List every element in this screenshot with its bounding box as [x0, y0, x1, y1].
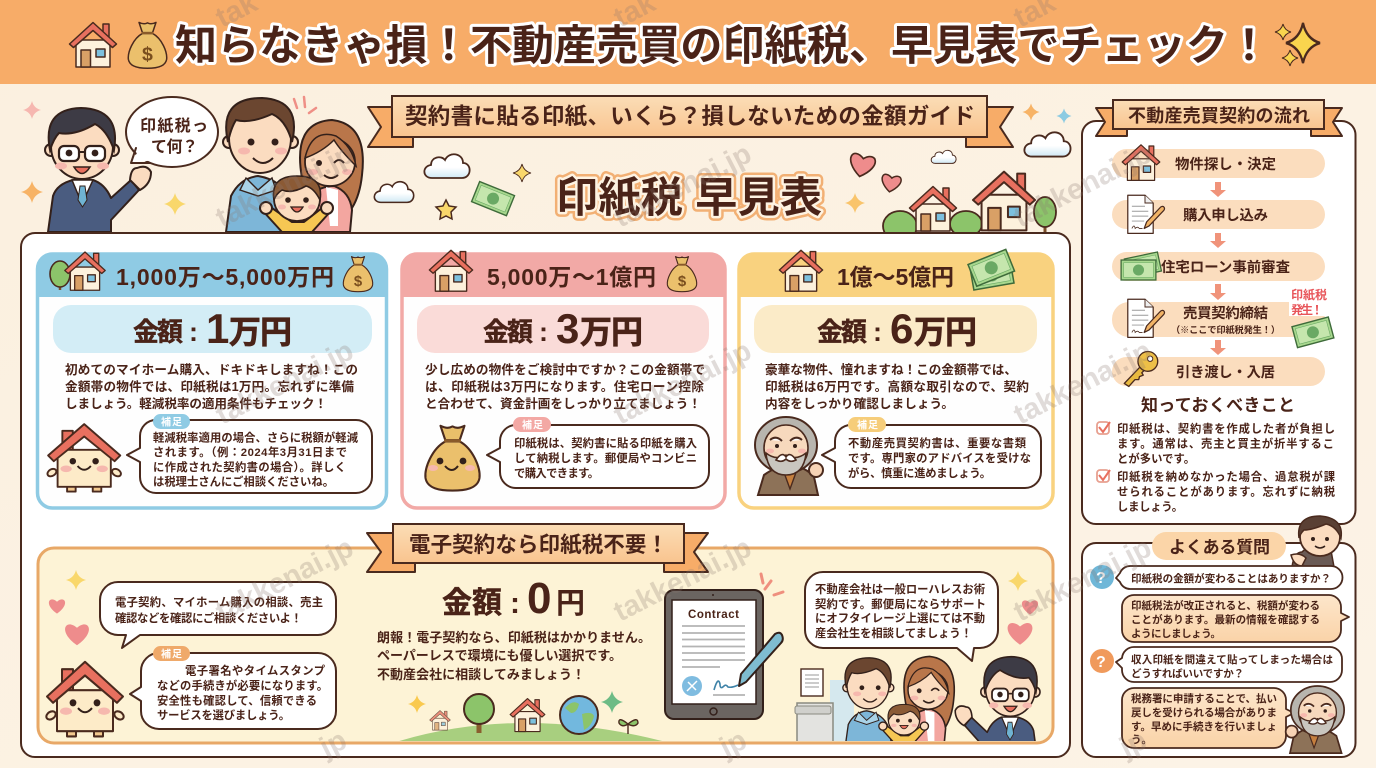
step 2: [1112, 195, 1325, 233]
note bubble: [127, 414, 372, 493]
price range heading: 1,000万〜5,000万円: [116, 264, 334, 290]
panel: 1億〜5億円: [739, 249, 1053, 508]
illustration: office, family and agent: [794, 656, 1041, 741]
description text: [377, 630, 651, 682]
speech bubble: [126, 97, 218, 167]
watermarks: takkenai.jp: [211, 335, 359, 431]
panel: electronic contract: [38, 548, 1053, 761]
description text: [765, 362, 1029, 411]
main heading: 印紙税 早見表: [556, 174, 822, 221]
watermarks: [211, 0, 1157, 765]
step 3: 住宅ローン事前審査: [1161, 258, 1290, 276]
icon: flying banknote: [472, 182, 515, 216]
watermarks: takkenai.jp: [1009, 532, 1157, 628]
amount pill: 6: [890, 305, 913, 352]
question icon: [1090, 649, 1114, 673]
description text: は、印紙税は3万円になります。住宅ローン控除: [425, 379, 704, 394]
arrow: [1210, 233, 1226, 248]
illustration: family: [223, 98, 363, 232]
note bubble: 補足: [161, 416, 182, 428]
watermarks: takkenai.jp: [609, 532, 757, 628]
question 2: どうすればいいですか？: [1131, 667, 1244, 680]
note bubble: 軽減税率適用の場合、さらに税額が軽減: [153, 430, 359, 444]
note bubble: 不動産売買契約書は、重要な書類: [848, 436, 1027, 450]
speech bubble: consult: 確認などを確認にご相談くださいよ！: [115, 611, 302, 625]
amount: [442, 574, 585, 623]
amount pill: :: [539, 317, 548, 347]
speech bubble: 印紙税っ: [140, 116, 208, 135]
note bubble: して納税します。郵便局やコンビニ: [514, 451, 697, 465]
watermarks: takkenai.jp: [609, 138, 757, 234]
banner: electronic contract ribbon: [367, 524, 708, 572]
amount: 0: [527, 574, 551, 623]
main heading: 印紙税 早見表: [556, 174, 822, 221]
answer 1: ようにしましょう。: [1131, 628, 1221, 640]
panel: FAQ: [1082, 516, 1356, 757]
header band: [0, 0, 1376, 84]
watermarks: jp: [314, 724, 352, 765]
watermarks: takkenai.jp: [211, 138, 359, 234]
checklist: [1097, 422, 1336, 514]
watermarks: jp: [714, 724, 752, 765]
amount pill: 1: [206, 305, 229, 352]
description text: と合わせて、資金計画をしっかり立てましょう！: [425, 396, 701, 411]
mascot: money bag: [425, 426, 480, 491]
checklist: しましょう。: [1117, 500, 1183, 514]
callout: stamp tax occurs: 印紙税: [1291, 287, 1327, 302]
banner: subtitle ribbon: [368, 96, 1013, 147]
speech bubble: consult: 電子契約、マイホーム購入の相談、売主: [115, 595, 323, 609]
speech bubble: real estate agent: 契約です。郵便局にならサポート: [815, 597, 986, 611]
note bubble: 安全性も確認して、信頼できる: [157, 694, 317, 708]
answer 2: 戻しを受けられる場合がありま: [1131, 706, 1277, 719]
note bubble: されます。（例：2024年3月31日まで: [153, 445, 347, 459]
answer 2: [1122, 688, 1294, 748]
price range heading: 1億〜5億円: [837, 264, 954, 290]
icon: money bag: [128, 22, 167, 68]
answer 2: う。: [1131, 734, 1152, 746]
checklist: 印紙税を納めなかった場合、過怠税が課: [1117, 470, 1336, 484]
callout: stamp tax occurs: [1289, 286, 1334, 348]
note bubble: 補足: [161, 648, 182, 660]
decorative sparkles and hearts in top area: [21, 97, 1072, 219]
question icon: ?: [1096, 570, 1106, 587]
description text: [425, 362, 705, 411]
description text: 初めてのマイホーム購入、ドキドキしますね！この: [65, 362, 358, 377]
note bubble: サービスを選びましょう。: [157, 708, 290, 722]
speech bubble: consult: [100, 582, 336, 648]
banner: flow ribbon: 不動産売買契約の流れ: [1128, 106, 1310, 126]
step 1: [1112, 145, 1325, 180]
description text: 朗報！電子契約なら、印紙税はかかりません。: [377, 630, 651, 645]
step 1: 物件探し・決定: [1175, 155, 1276, 173]
note bubble: に作成された契約書の場合）。詳しく: [153, 460, 346, 474]
step 4: [1112, 286, 1334, 348]
answer 1: [1122, 595, 1349, 642]
main panel: [21, 233, 1070, 757]
amount pill: 万円: [914, 314, 977, 350]
amount pill: 金額: [483, 317, 533, 347]
note bubble: [487, 417, 709, 488]
description text: 少し広めの物件をご検討中ですか？この金額帯で: [425, 362, 705, 377]
note bubble: 印紙税は、契約書に貼る印紙を購入: [514, 436, 697, 450]
step 4: （※ここで印紙税発生！）: [1171, 324, 1280, 335]
watermarks: takkenai.jp: [609, 335, 757, 431]
character: senior advisor: [755, 417, 823, 495]
answer 1: ことがあります。最新の情報を確認する: [1131, 613, 1320, 626]
title: 知らなきゃ損！不動産売買の印紙税、早見表でチェック！: [175, 22, 1270, 69]
amount pill: 万円: [229, 314, 292, 350]
note bubble: 補足: [522, 418, 543, 432]
question 1: [1116, 566, 1342, 589]
character: senior advisor: [1286, 686, 1344, 753]
icon: tree and house: [50, 252, 105, 290]
clouds: [374, 132, 1071, 202]
checklist: 印紙税は、契約書を作成した者が負担し: [1117, 422, 1335, 436]
speech bubble: real estate agent: 産会社生を相談してましょう！: [815, 626, 972, 640]
question 1: 印紙税の金額が変わることはありますか？: [1131, 572, 1331, 585]
amount pill: 万円: [580, 314, 643, 350]
arrow: [1210, 284, 1226, 300]
watermarks: takkenai.jp: [1009, 335, 1157, 431]
price range heading: 5,000万〜1億円: [487, 264, 656, 290]
icon: sparkles: [1275, 23, 1320, 66]
amount pill: 金額: [817, 317, 867, 347]
step 2: 購入申し込み: [1183, 206, 1268, 224]
panel: 1,000万〜5,000万円: [38, 252, 386, 508]
amount pill: 3: [556, 305, 579, 352]
illustration: agent with speech bubble: [45, 97, 218, 232]
checklist: とが多いです。: [1117, 452, 1195, 466]
illustration: houses and trees: [883, 172, 1056, 241]
note bubble: などの手続きが必要になります。: [157, 678, 328, 692]
watermarks: jp: [1114, 724, 1152, 765]
amount: :: [510, 587, 520, 620]
description text: ペーパーレスで環境にも優しい選択です。: [377, 648, 622, 663]
heading: things to know: 知っておくべきこと: [1141, 396, 1295, 415]
banner: flow ribbon: [1096, 100, 1342, 136]
icon: house: [779, 250, 823, 291]
checklist: ます。通常は、売主と買主が折半するこ: [1117, 436, 1334, 450]
scenery: hill, houses, tree, globe: [396, 691, 666, 742]
illustration: tablet with contract: Contract: [688, 609, 739, 621]
speech bubble: real estate agent: にオフタイレージ上選にては不動: [815, 611, 985, 625]
mascot: house: [45, 662, 125, 736]
amount pill: [53, 305, 372, 353]
answer 1: 印紙税法が改正されると、税額が変わる: [1131, 599, 1320, 612]
heading pill: よくある質問: [1169, 538, 1270, 557]
question 2: [1116, 647, 1342, 682]
speech bubble: real estate agent: [805, 572, 998, 661]
note bubble: で購入できます。: [514, 466, 599, 480]
step 5: 引き渡し・入居: [1176, 363, 1275, 381]
mascot: house: [46, 424, 122, 492]
heading pill: [1152, 532, 1286, 560]
speech bubble: real estate agent: 不動産会社は一般ローハレスお術: [815, 582, 985, 596]
amount pill: :: [189, 317, 198, 347]
question icon: ?: [1096, 654, 1106, 671]
icon: banknotes: [968, 249, 1015, 290]
description text: 印紙税は6万円です。高額な取引なので、契約: [765, 379, 1029, 394]
amount pill: 金額: [133, 317, 183, 347]
icon: house: [70, 22, 116, 67]
answer 2: 税務署に申請することで、払い: [1131, 692, 1277, 705]
description text: 内容をしっかり確認しましょう。: [765, 396, 954, 411]
panel: contract flow: [1082, 100, 1356, 524]
description text: [65, 362, 358, 411]
note bubble: 電子署名やタイムスタンプ: [185, 664, 326, 678]
note bubble: 補足: [857, 418, 878, 432]
description text: 金額帯の物件では、印紙税は1万円。忘れずに準備: [65, 379, 354, 394]
amount pill: [417, 305, 709, 353]
arrow: [1210, 340, 1226, 355]
note bubble: です。専門家のアドバイスを受けな: [848, 451, 1031, 465]
amount pill: [754, 305, 1037, 353]
description text: 不動産会社に相談してみましょう！: [377, 667, 585, 682]
speech bubble: て何？: [151, 137, 198, 156]
icon: money bag: [667, 257, 697, 292]
banner: subtitle ribbon: 契約書に貼る印紙、いくら？損しないための金額ガイド: [405, 104, 975, 129]
illustration: tablet with contract: [665, 574, 783, 719]
step 4: 売買契約締結: [1183, 304, 1268, 322]
answer 2: す。早めに手続きを行いましょ: [1131, 720, 1277, 733]
amount: 円: [556, 588, 585, 620]
note bubble: [130, 646, 336, 729]
description text: 豪華な物件、憧れますね！この金額帯では、: [765, 362, 1017, 377]
checklist: せられることがあります。忘れずに納税: [1117, 484, 1336, 498]
description text: しましょう。軽減税率の適用条件もチェック！: [65, 396, 327, 411]
icon: house: [429, 250, 473, 291]
decorative hearts and sparkles: [49, 570, 1038, 645]
icon: money bag: [343, 257, 373, 292]
character: staff: [1291, 516, 1341, 567]
amount: 金額: [442, 587, 502, 620]
panel: 5,000万〜1億円: [402, 250, 725, 508]
watermarks: takkenai.jp: [1009, 138, 1157, 234]
question 2: 収入印紙を間違えて貼ってしまった場合は: [1131, 653, 1334, 666]
step 5: [1112, 352, 1325, 386]
note bubble: は税理士さんにご相談くださいね。: [153, 474, 334, 488]
question icon: [1090, 565, 1114, 589]
step 3: [1112, 252, 1325, 281]
watermarks: takkenai.jp: [211, 532, 359, 628]
arrow: [1210, 182, 1226, 197]
note bubble: [822, 417, 1041, 488]
amount pill: :: [873, 317, 882, 347]
note bubble: がら、慎重に進めましょう。: [848, 466, 991, 480]
banner: electronic contract ribbon: 電子契約なら印紙税不要！: [409, 533, 668, 557]
callout: stamp tax occurs: 発生！: [1291, 302, 1323, 317]
